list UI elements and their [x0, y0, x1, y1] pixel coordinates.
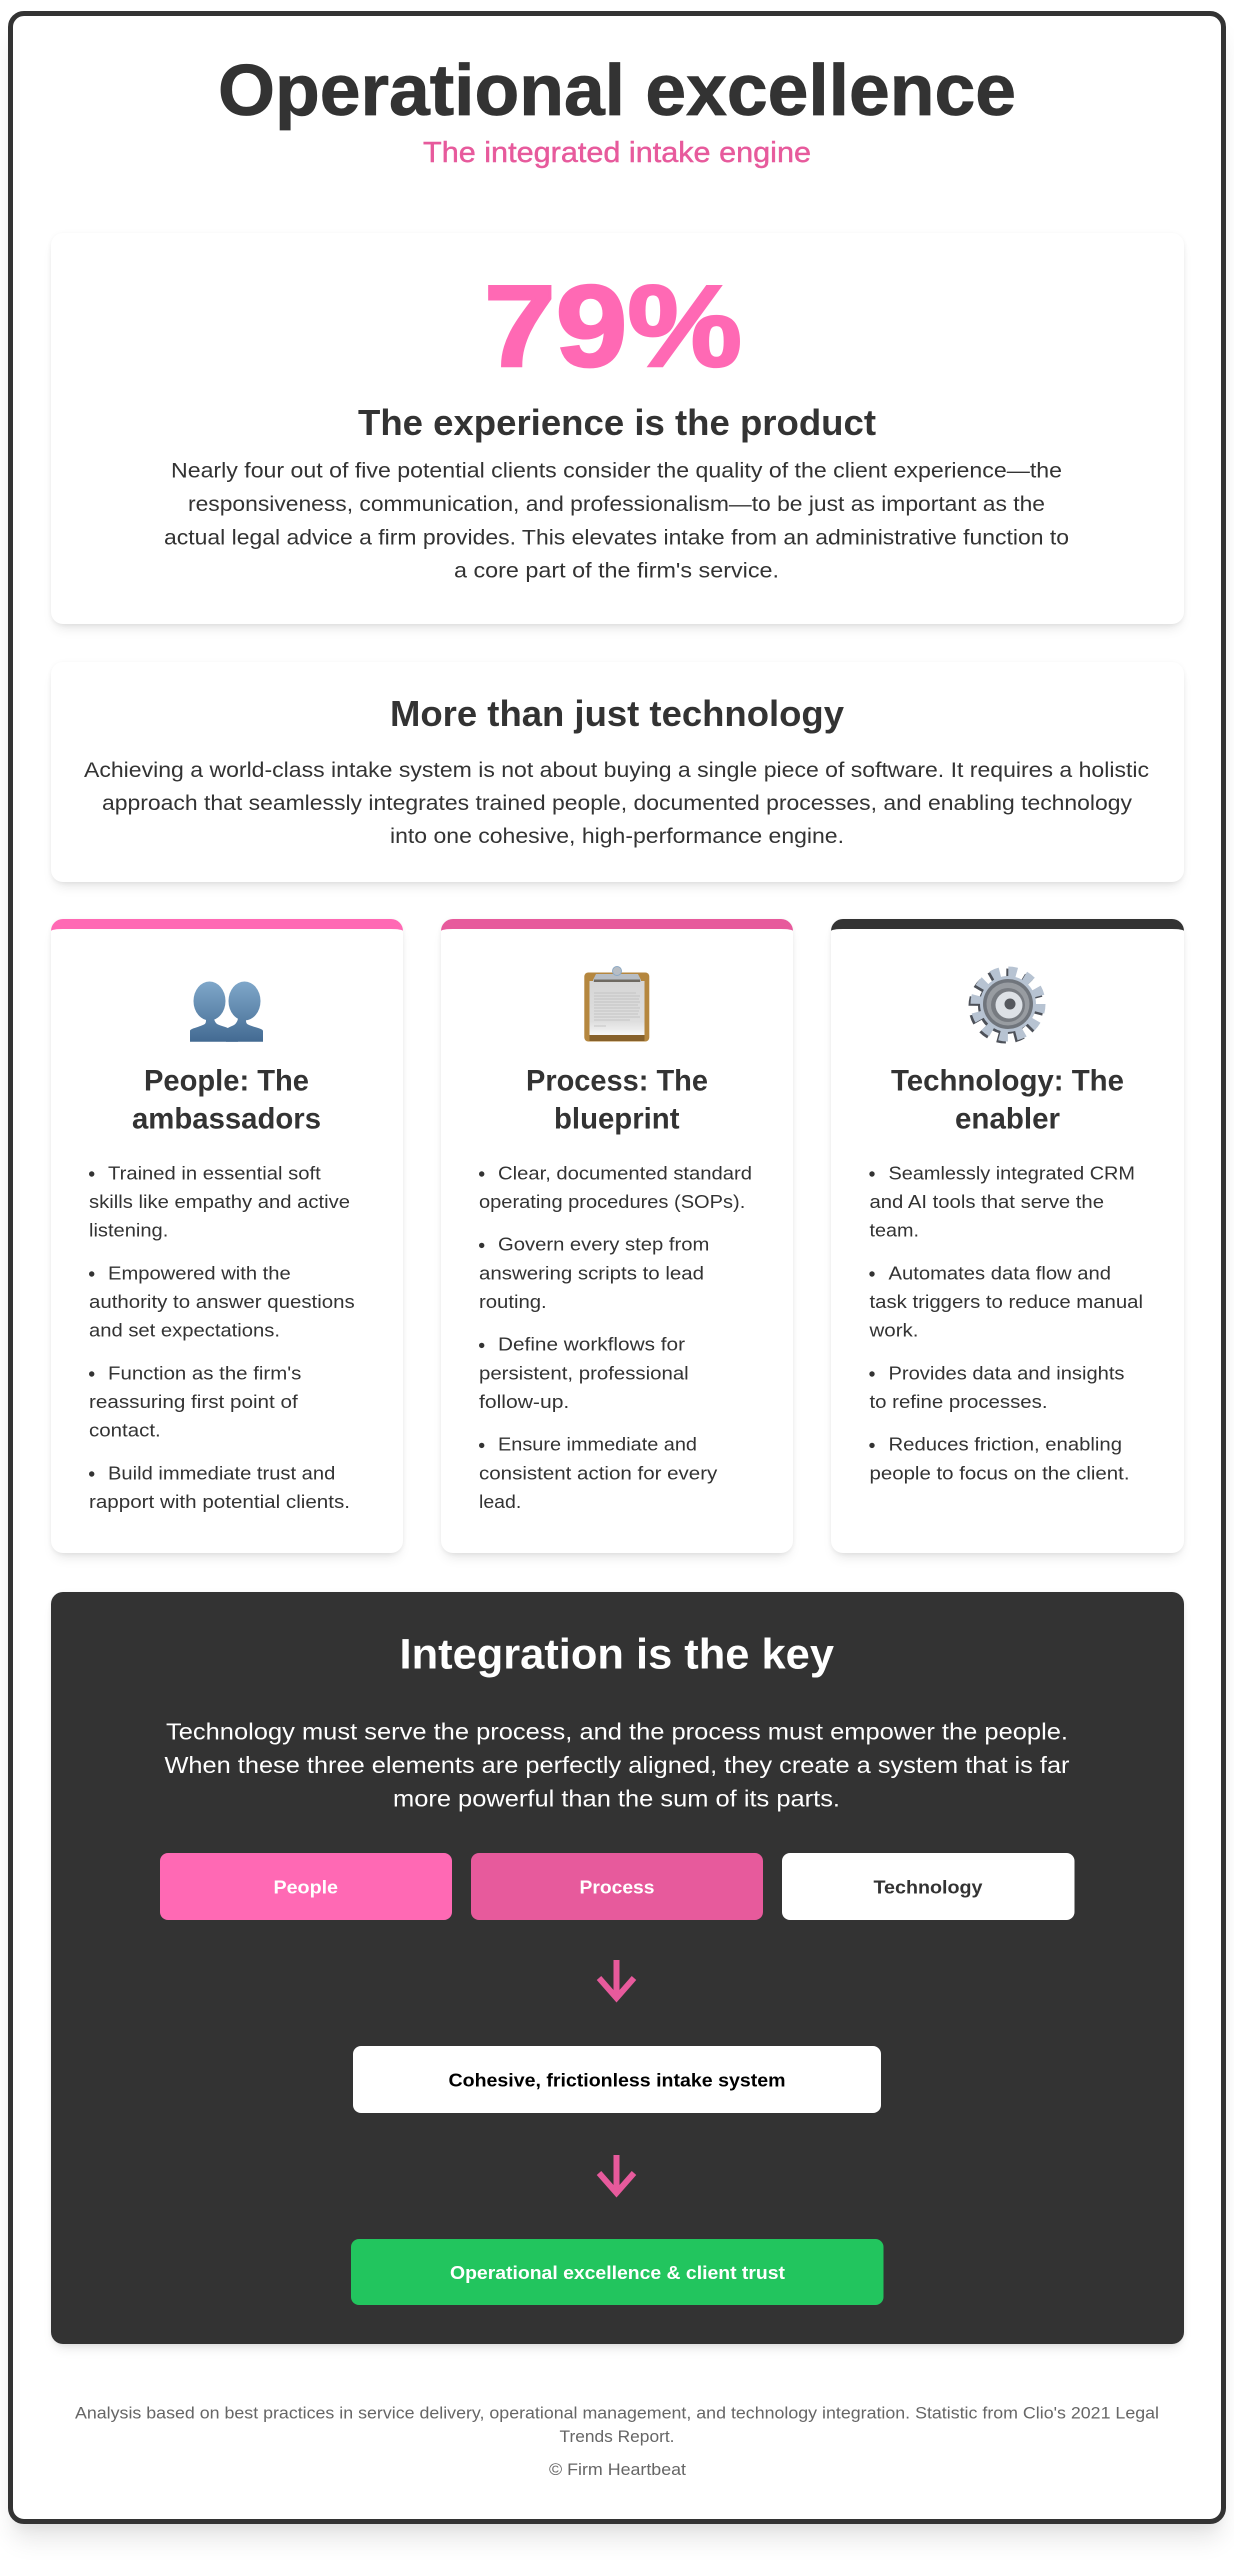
- bullet list: Automates data flow and: [888, 1262, 1111, 1283]
- bullet list: people to focus on the client.: [870, 1462, 1130, 1483]
- bullet list: and AI tools that serve the: [870, 1191, 1104, 1212]
- icon: clipboard: [584, 966, 649, 1042]
- box: operational excellence: Operational excellence & client trust: [450, 2262, 786, 2283]
- heading: ambassadors: [132, 1104, 321, 1136]
- bullet list: skills like empathy and active: [89, 1191, 350, 1212]
- big number: 79%: [484, 261, 742, 391]
- bullet list: Empowered with the: [108, 1262, 291, 1283]
- body text: [164, 1719, 1070, 1812]
- bullet list: answering scripts to lead: [479, 1262, 704, 1283]
- panel: more than just technology: [51, 662, 1184, 882]
- bullet list: Provides data and insights: [888, 1362, 1124, 1383]
- box: people: [160, 1853, 452, 1920]
- footer: [75, 2404, 1159, 2479]
- bullet list: Function as the firm's: [108, 1362, 301, 1383]
- subtitle: The integrated intake engine: [423, 137, 811, 169]
- bullet list: Ensure immediate and: [498, 1434, 697, 1455]
- panel: people: [51, 919, 403, 1553]
- title: Operational excellence: [218, 51, 1016, 131]
- body text: more powerful than the sum of its parts.: [393, 1786, 840, 1812]
- bullet list: lead.: [479, 1491, 521, 1512]
- panel: integration is the key: [51, 1592, 1184, 2344]
- bullet list: [89, 1162, 355, 1512]
- heading: enabler: [955, 1104, 1060, 1136]
- source note: Analysis based on best practices in service delivery, operational management, and technology integration. Statistic from Clio's 2021 Legal: [75, 2404, 1159, 2422]
- bullet list: [479, 1162, 752, 1512]
- bullet list: Clear, documented standard: [498, 1162, 752, 1183]
- header: [218, 51, 1016, 169]
- body text: [84, 758, 1149, 848]
- body text: Technology must serve the process, and the process must empower the people.: [166, 1719, 1068, 1745]
- bullet list: and set expectations.: [89, 1320, 280, 1341]
- box: cohesive system: [353, 2046, 881, 2113]
- bullet list: authority to answer questions: [89, 1291, 355, 1312]
- heading: [526, 1066, 708, 1136]
- bullet list: [868, 1162, 1143, 1483]
- source note: Trends Report.: [560, 2428, 674, 2446]
- bullet list: routing.: [479, 1291, 547, 1312]
- source note: [75, 2404, 1159, 2446]
- bullet list: reassuring first point of: [89, 1391, 299, 1412]
- bullet list: to refine processes.: [870, 1391, 1048, 1412]
- box: operational excellence: [351, 2239, 884, 2305]
- body text: approach that seamlessly integrates trained people, documented processes, and enabling technology: [102, 791, 1132, 815]
- heading: Technology: The: [891, 1066, 1124, 1098]
- arrow: [599, 1960, 634, 1999]
- bullet list: contact.: [89, 1420, 161, 1441]
- bullet list: follow-up.: [479, 1391, 569, 1412]
- body text: actual legal advice a firm provides. This elevates intake from an administrative function to: [164, 526, 1069, 550]
- body text: [164, 458, 1069, 582]
- heading: Process: The: [526, 1066, 708, 1098]
- bullet list: persistent, professional: [479, 1362, 689, 1383]
- box: technology: [782, 1853, 1074, 1920]
- body text: Achieving a world-class intake system is not about buying a single piece of software. It requires a holistic: [84, 758, 1149, 782]
- heading: [132, 1066, 321, 1136]
- bullet list: team.: [870, 1220, 919, 1241]
- panel: technology: [831, 919, 1184, 1553]
- arrow: [599, 2155, 634, 2194]
- bullet list: rapport with potential clients.: [89, 1491, 350, 1512]
- bullet list: Trained in essential soft: [108, 1162, 321, 1183]
- heading: More than just technology: [390, 693, 845, 734]
- body text: When these three elements are perfectly aligned, they create a system that is far: [164, 1752, 1070, 1778]
- body text: a core part of the firm's service.: [454, 558, 779, 582]
- panel: process: [441, 919, 793, 1553]
- bullet list: task triggers to reduce manual: [870, 1291, 1143, 1312]
- body text: responsiveness, communication, and professionalism—to be just as important as the: [188, 492, 1045, 516]
- heading: blueprint: [554, 1104, 680, 1136]
- heading: [891, 1066, 1124, 1136]
- icon: people silhouettes: [190, 982, 263, 1042]
- bullet list: operating procedures (SOPs).: [479, 1191, 745, 1212]
- heading: People: The: [144, 1066, 309, 1098]
- bullet list: listening.: [89, 1220, 168, 1241]
- body text: Nearly four out of five potential clients consider the quality of the client experience—the: [171, 458, 1062, 482]
- heading: The experience is the product: [358, 402, 876, 443]
- bullet list: Reduces friction, enabling: [888, 1434, 1122, 1455]
- bullet list: Build immediate trust and: [108, 1462, 335, 1483]
- box: process: [471, 1853, 763, 1920]
- panel: 79% statistic: [51, 233, 1184, 624]
- box: technology: Technology: [874, 1876, 983, 1897]
- bullet list: Define workflows for: [498, 1334, 685, 1355]
- bullet list: work.: [868, 1320, 918, 1341]
- bullet list: Govern every step from: [498, 1234, 709, 1255]
- box: process: Process: [580, 1876, 654, 1897]
- heading: Integration is the key: [400, 1631, 834, 1678]
- bullet list: Seamlessly integrated CRM: [888, 1162, 1135, 1183]
- bullet list: consistent action for every: [479, 1462, 718, 1483]
- box: people: People: [274, 1876, 338, 1897]
- body text: into one cohesive, high-performance engine.: [390, 824, 844, 848]
- icon: gear: [974, 972, 1040, 1038]
- box: cohesive system: Cohesive, frictionless intake system: [448, 2070, 786, 2091]
- copyright: © Firm Heartbeat: [549, 2461, 686, 2479]
